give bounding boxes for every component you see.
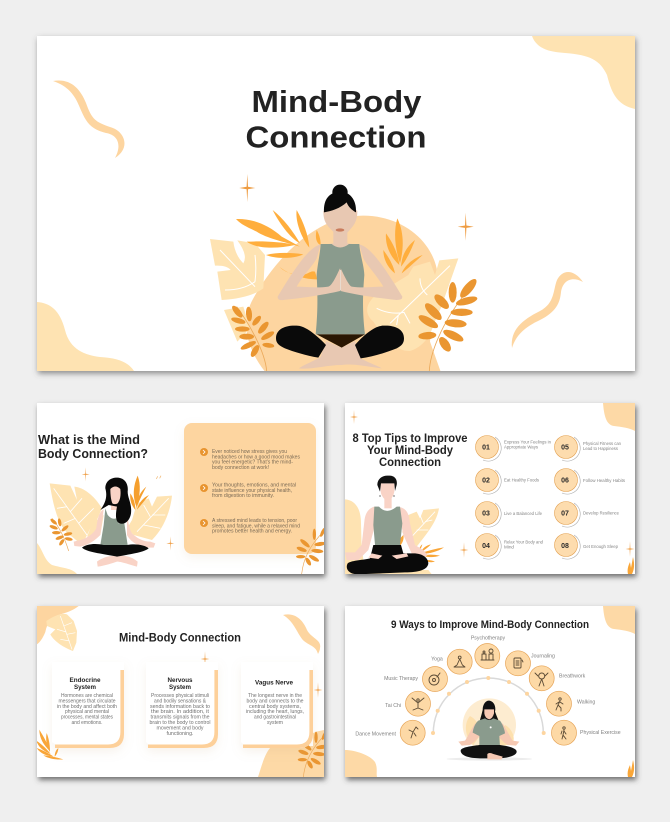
tip 08 xyxy=(554,534,618,559)
orange fronds left xyxy=(236,210,321,279)
heading xyxy=(352,433,468,469)
step: dance movement: Dance Movement xyxy=(355,732,397,738)
icon: sparkle xyxy=(626,542,634,556)
illustration: orange sprig right xyxy=(296,527,326,574)
title xyxy=(246,90,424,148)
swirl: top right xyxy=(283,614,320,654)
tip 06: Follow Healthy Habits xyxy=(583,478,626,484)
card: nervous system: Processes physical stimuli xyxy=(151,693,209,699)
card: nervous system: System xyxy=(169,685,191,691)
card: endocrine system: Endocrine xyxy=(70,678,101,684)
card: nervous system: sends information back to xyxy=(150,704,210,710)
blob: top right xyxy=(603,606,635,634)
swirl: upper left xyxy=(53,80,124,158)
step: tai chi: Tai Chi xyxy=(385,703,401,709)
illustration: corner frond xyxy=(628,557,634,574)
orange sprig xyxy=(49,518,73,551)
sparkle xyxy=(166,536,174,550)
icon: sparkle xyxy=(350,410,358,424)
icon: sparkle xyxy=(460,542,468,558)
right monstera leaf xyxy=(367,258,458,351)
illustration: corner frond xyxy=(628,760,634,777)
card: vagus nerve: including the heart, lungs, xyxy=(246,709,304,715)
step: music therapy: Music Therapy xyxy=(384,676,418,682)
bullet: point one: body connection at work! xyxy=(212,465,269,471)
card: endocrine system: messengers that circulate xyxy=(58,698,116,704)
tip 08: Get Enough Sleep xyxy=(583,544,618,550)
tip 05: 05 xyxy=(561,444,569,452)
panel: slide 1 cover xyxy=(37,36,635,372)
bullet: point two: Your thoughts, emotions, and mental xyxy=(212,482,296,488)
tip 03: 03 xyxy=(482,510,490,518)
bullet: point three xyxy=(200,518,300,535)
card: endocrine system: processes, mental states xyxy=(61,715,113,721)
tip 01: Appropriate Ways xyxy=(504,444,539,450)
tip 02: 02 xyxy=(482,478,490,484)
title: Mind-Body xyxy=(252,85,422,119)
tip 01: Express Your Feelings in xyxy=(504,440,551,446)
bullet: point two: state influence your physical health, xyxy=(212,488,292,494)
icon: sparkle right xyxy=(458,213,474,241)
card: nervous system: functioning. xyxy=(166,731,194,737)
sparkle xyxy=(82,467,90,481)
blob: top right xyxy=(603,403,635,431)
card: vagus nerve: central body systems, xyxy=(249,704,301,710)
panel: slide 5 nine ways xyxy=(345,606,635,777)
blob left xyxy=(345,499,432,575)
illustration: seated man scene xyxy=(345,476,444,575)
tip 02: Eat Healthy Foods xyxy=(504,478,540,484)
tip 07: 07 xyxy=(561,510,569,518)
icon: sparkle xyxy=(201,651,209,667)
step: journaling: Journaling xyxy=(531,654,555,660)
step: breathwork: Breathwork xyxy=(559,674,586,680)
bullet: point three: sleep, and fatigue, while a relaxed mind xyxy=(212,523,300,529)
panel: slide 2 what is the connection xyxy=(37,403,326,574)
blob: bottom left xyxy=(37,543,77,574)
illustration: top left blob and monstera xyxy=(37,606,79,651)
blob: bottom left xyxy=(345,750,377,777)
card: vagus nerve: The longest nerve in the xyxy=(248,693,302,699)
blob: top right corner xyxy=(532,36,635,109)
bullet: point one: Ever noticed how stress gives you xyxy=(212,449,287,455)
orange fronds right xyxy=(383,218,422,274)
step: psychotherapy: Psychotherapy xyxy=(471,636,506,642)
seated woman xyxy=(74,478,155,567)
bullet: point one: headaches or how a good mood makes xyxy=(212,454,300,460)
seated man xyxy=(345,476,428,574)
card: vagus nerve: system xyxy=(267,720,283,726)
step: psychotherapy xyxy=(471,636,506,668)
panel: text card xyxy=(184,423,316,554)
arc with dots xyxy=(431,676,546,735)
bullet: point two: from digestion to immunity. xyxy=(212,493,274,499)
heading: 8 Top Tips to Improve xyxy=(352,433,468,445)
tip 04: Mind xyxy=(504,545,514,551)
title: Connection xyxy=(246,120,426,154)
orange fronds xyxy=(398,535,444,562)
card: endocrine system: and emotions. xyxy=(72,720,102,726)
monstera left xyxy=(50,483,104,545)
heading: Mind-Body Connection xyxy=(119,630,241,644)
heading: 9 Ways to Improve Mind-Body Connection xyxy=(391,619,589,631)
bullet: point one xyxy=(200,448,300,471)
tip 08: 08 xyxy=(561,543,569,550)
card: nervous system: Nervous xyxy=(168,678,193,684)
step: physical exercise: Physical Exercise xyxy=(580,730,621,736)
step: yoga xyxy=(431,649,472,674)
card: vagus nerve: Vagus Nerve xyxy=(255,680,294,686)
tip 04: 04 xyxy=(482,543,490,550)
right orange sprig xyxy=(417,277,479,371)
card: nervous system: transmits signals from the xyxy=(150,715,210,721)
tip 01 xyxy=(476,436,551,461)
tip 02 xyxy=(476,468,540,494)
left orange sprig xyxy=(230,304,275,371)
tip 04: Relax Your Body and xyxy=(504,540,543,546)
heading: What is the Mind xyxy=(38,433,140,447)
tip 07 xyxy=(554,502,619,527)
heading: Connection xyxy=(379,457,441,469)
tip 05: Physical Fitness can xyxy=(583,441,621,447)
tip 06 xyxy=(554,468,626,494)
card: nervous system: movement and body xyxy=(156,725,204,731)
monstera right xyxy=(127,496,172,540)
bullet: point two xyxy=(200,482,296,499)
bullet: point three: A stressed mind leads to tension, poor xyxy=(212,518,297,524)
heading xyxy=(38,433,148,461)
tip 01: 01 xyxy=(482,444,490,452)
sun shape xyxy=(246,216,441,372)
swirl: lower right xyxy=(512,272,583,348)
tip 06: 06 xyxy=(561,478,569,484)
card: vagus nerve: body and connects to the xyxy=(246,698,304,704)
step: breathwork xyxy=(529,666,586,691)
tip 04 xyxy=(476,534,543,559)
bullet: point one: you feel energetic? That's the mind- xyxy=(212,460,293,466)
step: yoga: Yoga xyxy=(431,656,443,662)
meditating woman xyxy=(276,185,404,369)
tip 07: Develop Resilience xyxy=(583,511,619,517)
heading: Your Mind-Body xyxy=(367,445,454,457)
tip 03: Live a Balanced Life xyxy=(504,511,542,517)
card: nervous system: the brain. In addition, it xyxy=(151,709,210,715)
heading: Body Connection? xyxy=(38,447,148,461)
illustration: yoga scene xyxy=(210,185,479,372)
card: vagus nerve xyxy=(241,662,313,748)
card: endocrine system: in the body and affect both xyxy=(57,704,117,710)
bullet: point three: promotes better health and energy. xyxy=(212,529,292,535)
illustration: seated woman scene xyxy=(49,467,174,567)
blob: bottom left corner xyxy=(37,302,134,371)
illustration: orange frond bottom left xyxy=(36,730,63,759)
card: endocrine system: System xyxy=(74,685,96,691)
icon: sparkle xyxy=(314,682,322,698)
blob: bottom right xyxy=(258,730,324,777)
orange frond xyxy=(130,476,161,510)
monstera xyxy=(402,508,439,547)
panel: slide 3 eight tips xyxy=(345,403,635,575)
illustration: meditating woman with sun xyxy=(447,698,532,761)
tip 05: Lead to Happiness xyxy=(583,446,619,452)
tip 05 xyxy=(554,436,621,461)
step: physical exercise xyxy=(552,720,621,745)
card: nervous system: and bodily sensations & xyxy=(154,698,207,704)
card: vagus nerve: and gastrointestinal xyxy=(254,715,296,721)
card: endocrine system xyxy=(52,662,124,748)
step: walking: Walking xyxy=(577,699,595,705)
card: endocrine system: physical and mental xyxy=(65,709,109,715)
left monstera leaf xyxy=(210,239,265,342)
step: dance movement xyxy=(355,720,425,745)
card: nervous system xyxy=(146,662,218,748)
step: journaling xyxy=(506,651,555,676)
step: music therapy xyxy=(384,666,448,692)
panel: slide 4 three systems xyxy=(36,606,328,777)
step: tai chi xyxy=(385,691,430,716)
card: nervous system: brain to the body to control xyxy=(150,720,210,726)
step: walking xyxy=(546,691,595,716)
tip 03 xyxy=(476,502,542,527)
icon: sparkle left xyxy=(239,174,255,202)
card: endocrine system: Hormones are chemical xyxy=(61,693,113,699)
illustration: orange sprig bottom right xyxy=(298,730,328,777)
